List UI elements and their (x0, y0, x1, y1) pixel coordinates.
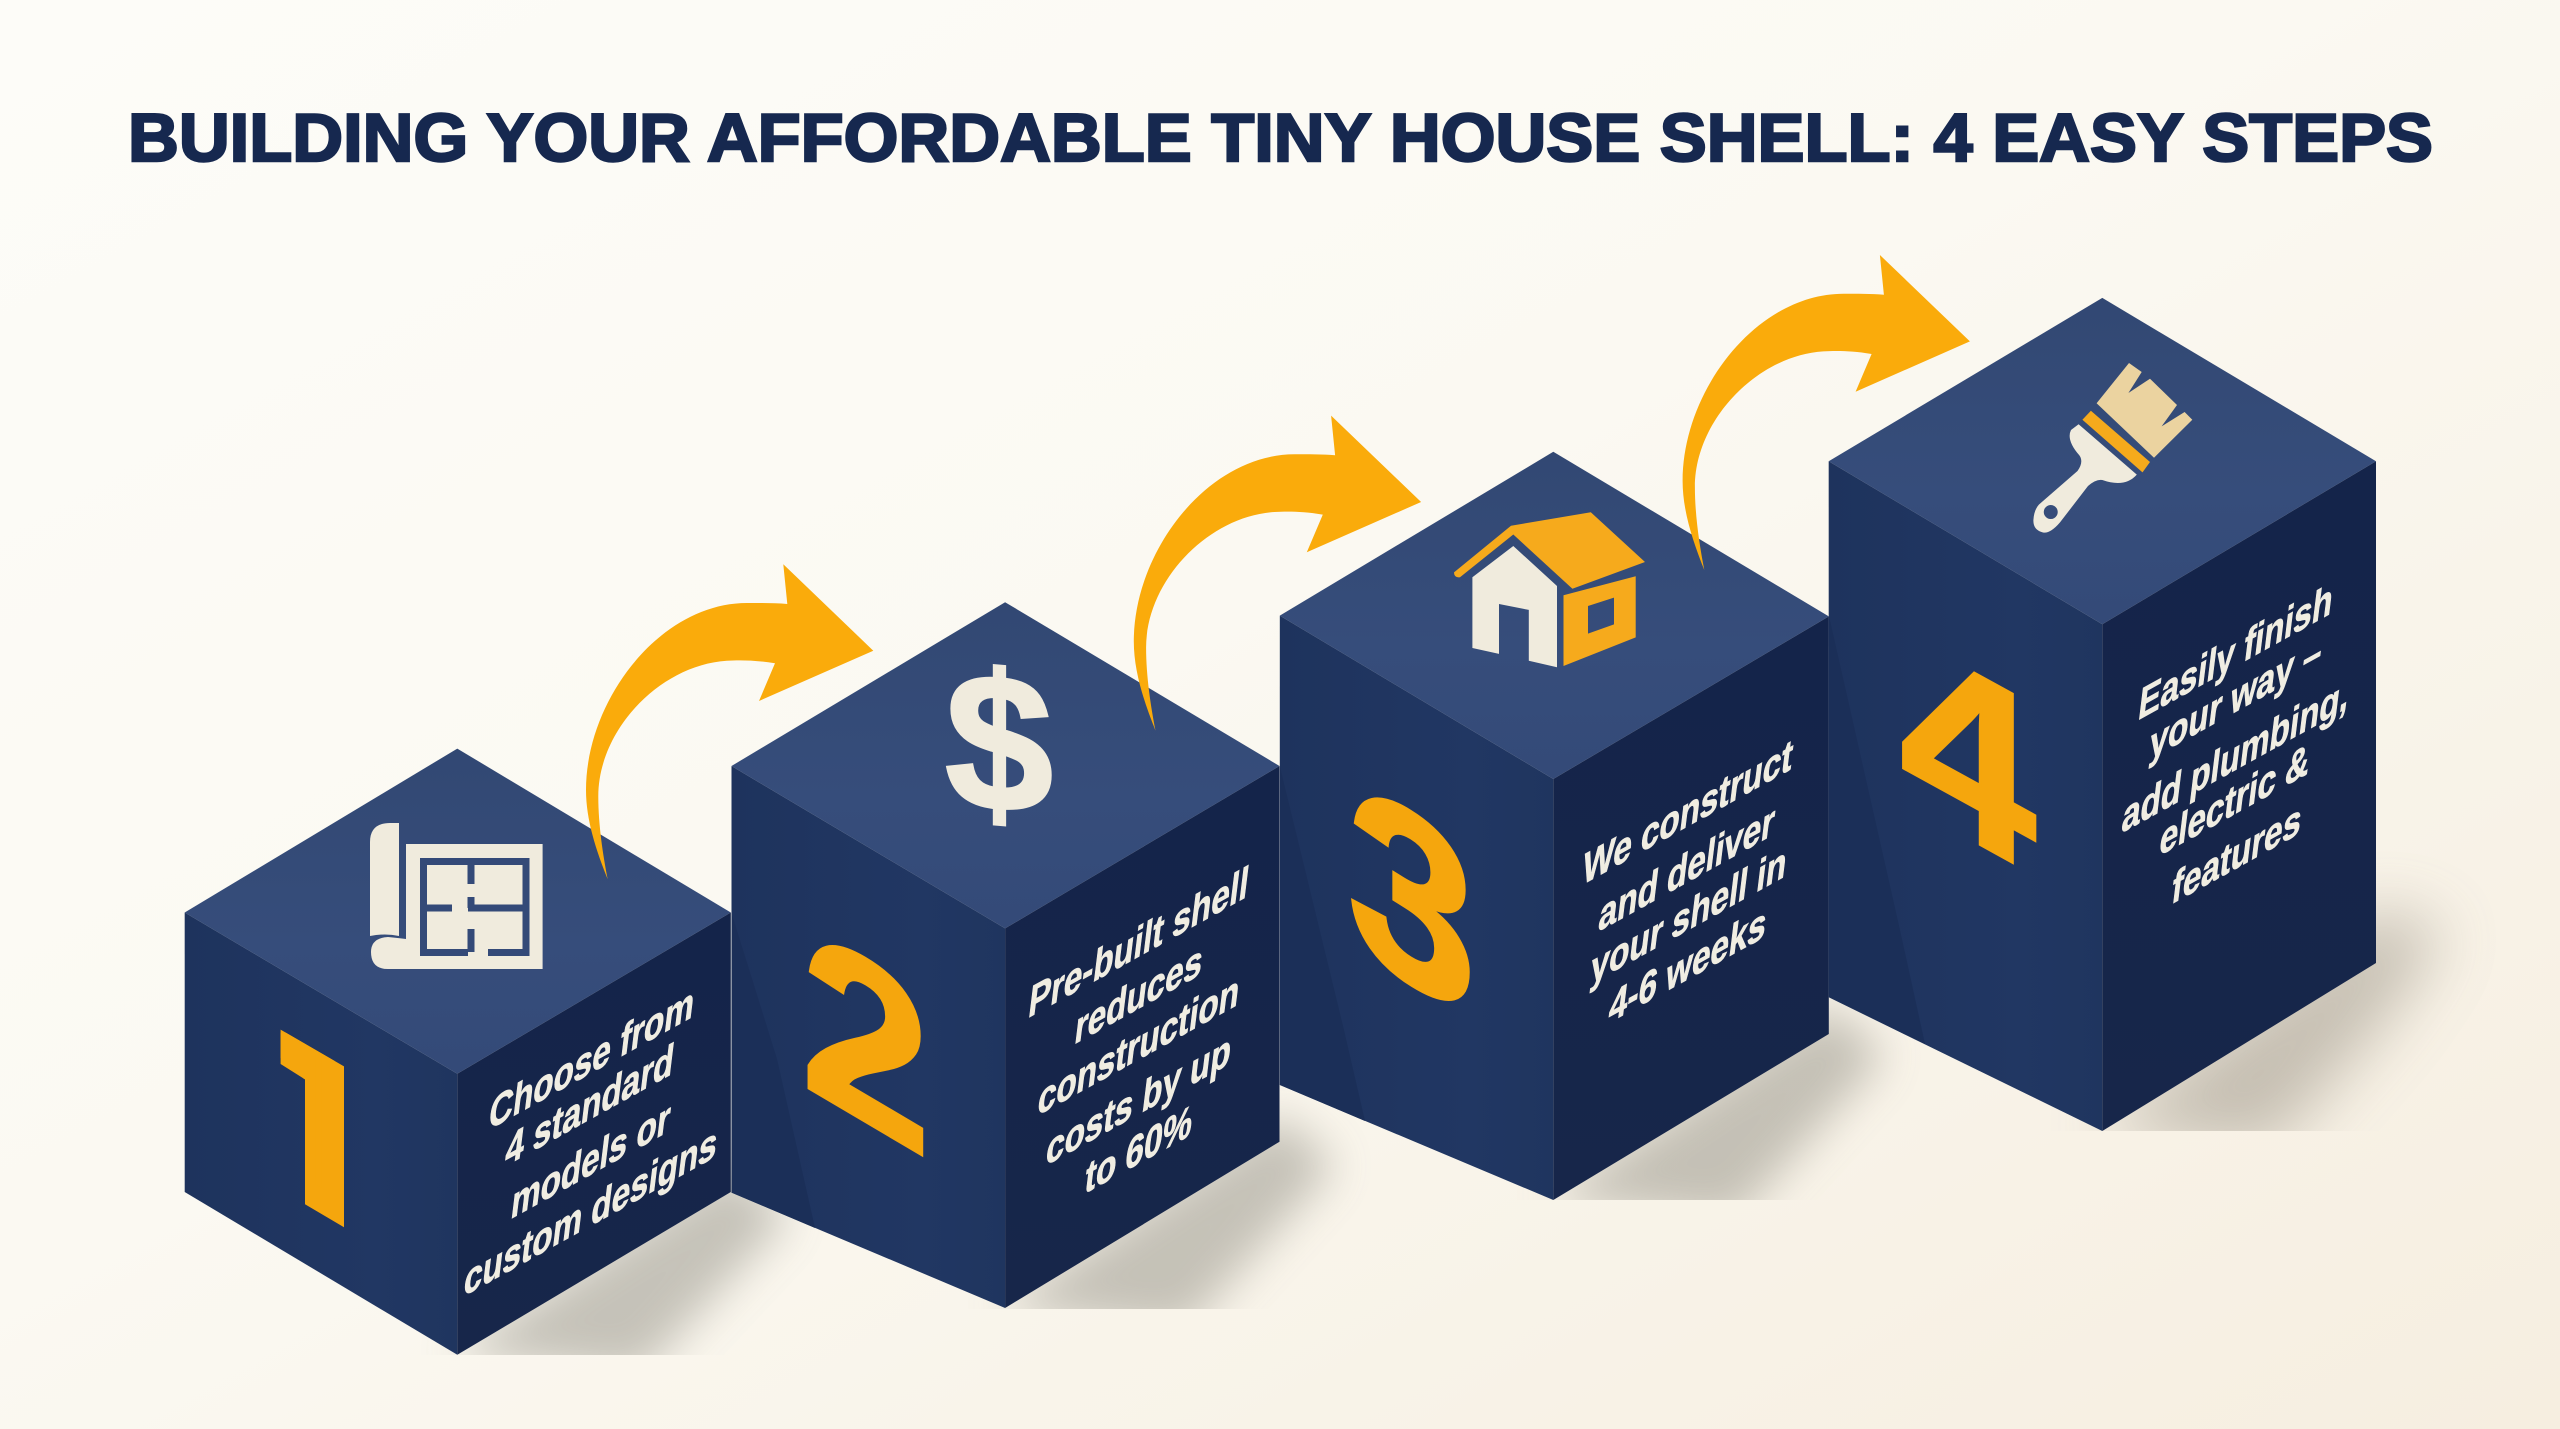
left face (1829, 461, 2102, 1131)
step 3 text: We construct (1580, 728, 1796, 895)
right face (457, 912, 731, 1355)
shaded wedge (732, 913, 815, 1228)
step 3 text: 4-6 weeks (1606, 896, 1769, 1034)
step 2 text: costs by up (1044, 1023, 1234, 1176)
right face (1005, 766, 1280, 1308)
top face (1829, 298, 2376, 624)
step 3 text: and deliver (1596, 794, 1778, 942)
cube shadows (450, 910, 2445, 1375)
step 2 text: reduces (1072, 933, 1206, 1055)
arrow: step 1 to step 2 (586, 564, 873, 879)
arrow: step 2 to step 3 (1134, 416, 1421, 731)
step 1 text: models or (509, 1090, 673, 1229)
step 2 text: construction (1035, 964, 1243, 1126)
step 4 text: your way – (2147, 624, 2325, 770)
number 4: 4 (1900, 579, 2038, 929)
step 4 text: electric & (2157, 732, 2313, 866)
right face (2102, 461, 2376, 1131)
shaded wedge (1829, 616, 1925, 1044)
title: BUILDING YOUR AFFORDABLE TINY HOUSE SHELL: 4 EASY STEPS (128, 100, 2433, 176)
step 1 text (461, 976, 720, 1306)
step 4 text: Easily finish (2136, 572, 2336, 730)
step 2 block (732, 602, 1280, 1308)
top face (1280, 452, 1829, 779)
left face (732, 766, 1005, 1308)
step 2 text: to 60% (1082, 1094, 1196, 1204)
step 2 text: Pre-built shell (1026, 856, 1252, 1028)
step 1 block (185, 749, 731, 1355)
icon: paint brush (2033, 363, 2192, 533)
step 4 text: add plumbing, (2119, 667, 2352, 843)
step 3 block (1280, 452, 1829, 1200)
icon: blueprint (370, 823, 543, 969)
arrow: step 3 to step 4 (1683, 255, 1970, 570)
right face (1553, 616, 1829, 1200)
top face (732, 602, 1280, 928)
top face (185, 749, 731, 1074)
shaded wedge (1280, 767, 1365, 1121)
icon: dollar sign: $ (945, 631, 1053, 856)
step 4 block (1829, 298, 2376, 1131)
step 3 text (1580, 728, 1796, 1034)
step 1 text: custom designs (461, 1116, 720, 1306)
step 1 text: 4 standard (503, 1033, 677, 1177)
step 4 text: features (2169, 792, 2305, 915)
number 3: 3 (1347, 722, 1477, 1076)
step 1 text: Choose from (486, 976, 697, 1140)
icon: house (1454, 512, 1645, 667)
step 3 text: your shell in (1588, 835, 1790, 995)
left face (1280, 616, 1553, 1200)
left face (185, 912, 457, 1355)
number 2: 2 (801, 871, 931, 1210)
step 4 text (2119, 572, 2352, 915)
number 1: 1 (248, 948, 378, 1284)
step 2 text (1026, 856, 1252, 1204)
